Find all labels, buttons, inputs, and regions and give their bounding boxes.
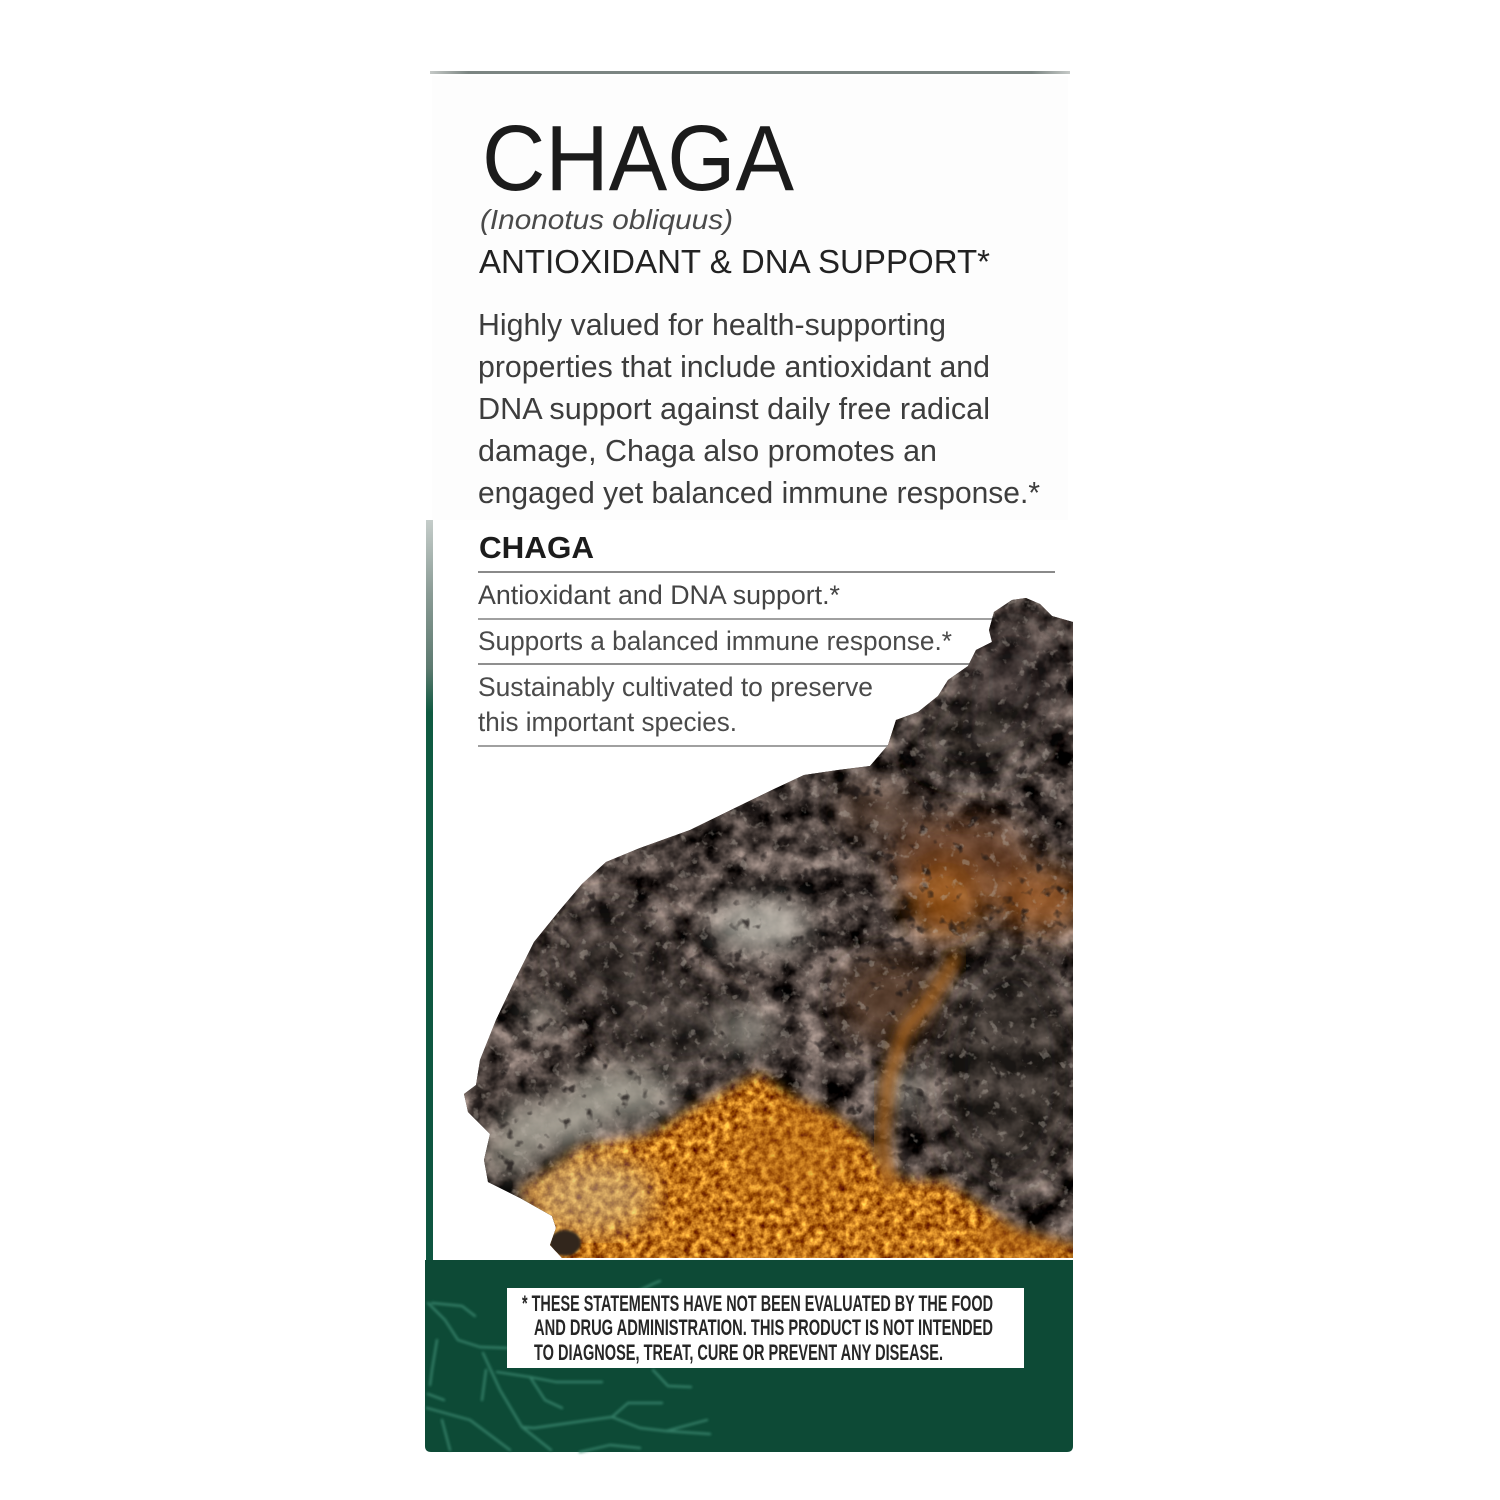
benefit: immune: Supports a balanced immune response.* (478, 626, 952, 656)
intro paragraph: Highly valued for health-supporting (478, 307, 946, 342)
benefit: sustainability (478, 672, 873, 737)
title: CHAGA (482, 106, 794, 210)
intro paragraph: damage, Chaga also promotes an (478, 433, 937, 468)
benefit: sustainability: Sustainably cultivated to preserve (478, 672, 873, 702)
disclaimer box (507, 1288, 1024, 1368)
root lines (428, 1303, 507, 1348)
shadowed bottom-left nub (549, 1230, 581, 1256)
dark lumps (550, 620, 1080, 1190)
list heading: CHAGA (479, 530, 594, 565)
top edge line (430, 71, 1070, 74)
rust patches (840, 785, 1085, 1045)
disclaimer text: TO DIAGNOSE, TREAT, CURE OR PREVENT ANY DISEASE. (534, 1340, 943, 1365)
orange inner flesh (514, 1066, 1073, 1258)
left green edge strip (426, 520, 433, 1265)
benefit: sustainability: this important species. (478, 707, 737, 737)
chaga product panel infographic (424, 71, 1073, 1455)
intro paragraph: engaged yet balanced immune response.* (478, 475, 1040, 510)
intro paragraph: DNA support against daily free radical (478, 391, 990, 426)
disclaimer text (522, 1291, 993, 1365)
disclaimer text: AND DRUG ADMINISTRATION. THIS PRODUCT IS NOT INTENDED (534, 1315, 993, 1340)
benefits list (478, 530, 1055, 747)
pale mycelium patches (482, 899, 923, 1173)
benefit: antioxidant: Antioxidant and DNA support.* (478, 580, 840, 610)
orange vein (882, 955, 958, 1190)
decorative branching roots (427, 1281, 710, 1452)
intro paragraph: properties that include antioxidant and (478, 349, 990, 384)
disclaimer text: * THESE STATEMENTS HAVE NOT BEEN EVALUATED BY THE FOOD (522, 1291, 993, 1316)
bottom green band (425, 1260, 1073, 1452)
intro paragraph (478, 307, 1040, 510)
chaga mushroom photo illustration (455, 590, 1085, 1270)
surface cracks (455, 590, 1075, 1270)
surface highlights (455, 590, 1075, 1270)
latin name: (Inonotus obliquus) (480, 204, 733, 235)
subtitle: ANTIOXIDANT & DNA SUPPORT* (479, 243, 990, 280)
panel: top off-white area (432, 76, 1068, 520)
